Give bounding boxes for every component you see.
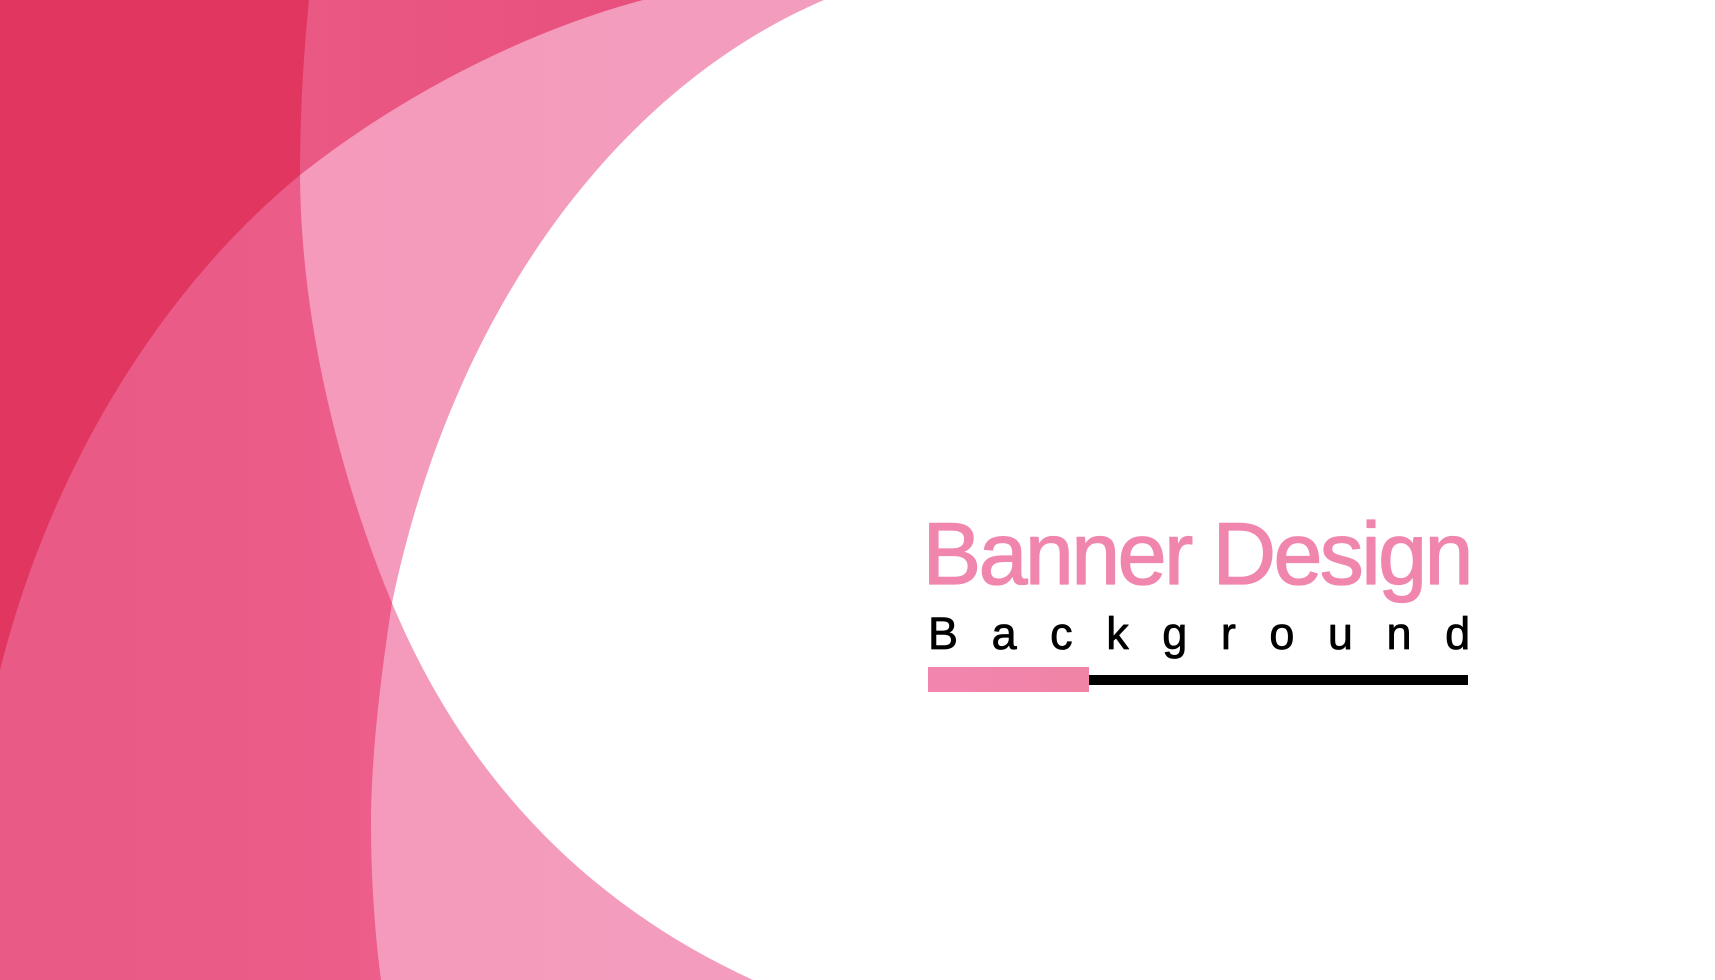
subtitle: Background: Background bbox=[928, 608, 1504, 659]
underline: pink accent block bbox=[928, 667, 1089, 692]
title: Banner Design: Banner Design bbox=[922, 504, 1471, 603]
wave: top mid pink layer bbox=[0, 0, 643, 670]
underline: black bar bbox=[1089, 675, 1468, 685]
wave: lower mid pink layer bbox=[0, 0, 392, 980]
wave: light pink layer bbox=[0, 0, 824, 980]
wave: dark crimson corner bbox=[0, 0, 309, 670]
